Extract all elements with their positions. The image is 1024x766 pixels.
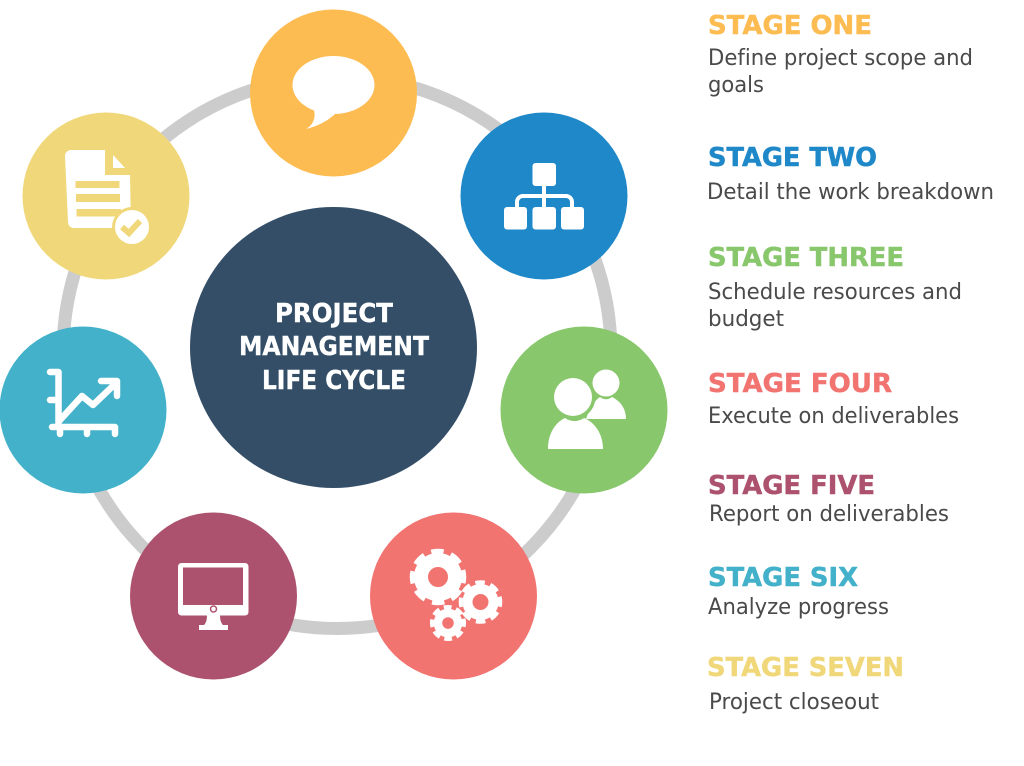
legend: stage six — [708, 563, 889, 620]
legend: stage one: goals — [708, 72, 764, 98]
legend: stage one: STAGE ONE — [708, 11, 872, 41]
center circle: project management life cycle: MANAGEMENT — [239, 332, 430, 362]
legend: stage three: STAGE THREE — [708, 243, 904, 273]
circle: stage two hierarchy — [460, 112, 628, 280]
legend: stage three — [708, 243, 962, 332]
circle: stage one speech bubble — [250, 10, 417, 176]
legend: stage five — [708, 471, 949, 527]
legend: stage two: STAGE TWO — [708, 143, 877, 173]
legend: stage three: budget — [708, 306, 784, 332]
legend: stage two: Detail the work breakdown — [707, 179, 994, 205]
legend: stage five: Report on deliverables — [709, 501, 949, 527]
legend: stage three: Schedule resources and — [708, 279, 962, 305]
legend: stage seven: Project closeout — [709, 689, 879, 715]
legend: stage six: Analyze progress — [708, 594, 889, 620]
circle: stage four gears — [370, 512, 537, 680]
center circle: project management life cycle: LIFE CYCLE — [262, 366, 406, 396]
icon: gears — [413, 552, 500, 639]
legend: stage five: STAGE FIVE — [708, 471, 875, 501]
legend: stage one — [708, 11, 973, 98]
circle: stage six chart — [0, 326, 166, 494]
legend: stage four — [708, 369, 959, 429]
circle: stage seven document — [22, 112, 190, 280]
icon: people — [548, 370, 626, 449]
legend: stage four: STAGE FOUR — [708, 369, 892, 399]
legend: stage six: STAGE SIX — [708, 563, 858, 593]
circle: stage three people — [500, 326, 668, 494]
center circle: project management life cycle: PROJECT — [275, 299, 394, 329]
legend: stage seven: STAGE SEVEN — [707, 653, 904, 683]
legend: stage seven — [707, 653, 904, 715]
legend: stage four: Execute on deliverables — [708, 403, 959, 429]
icon: speech bubble — [292, 56, 374, 129]
legend: stage two — [707, 143, 994, 205]
icon: monitor — [178, 563, 248, 630]
circle: stage five monitor — [130, 512, 297, 680]
icon: document with check — [65, 150, 152, 247]
icon: hierarchy — [504, 163, 584, 230]
center circle: project management life cycle — [190, 207, 477, 488]
icon: growth chart — [50, 372, 117, 434]
legend: stage one: Define project scope and — [708, 45, 973, 71]
